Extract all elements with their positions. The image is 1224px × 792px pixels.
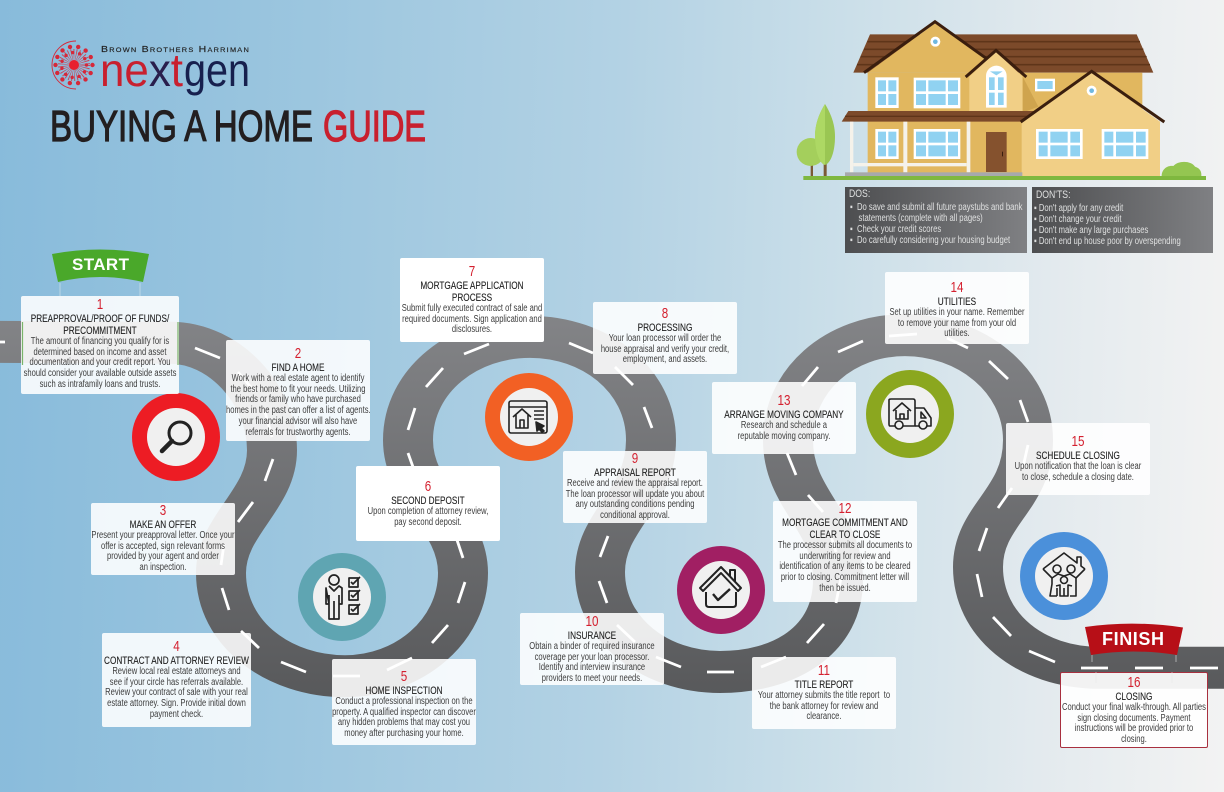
bush <box>1162 162 1201 176</box>
body 3 <box>91 530 235 573</box>
don'ts list <box>1034 202 1181 247</box>
don'ts heading: DON'TS: <box>1036 189 1070 201</box>
logo firm name: Brown Brothers Harriman <box>101 44 250 54</box>
body 4: see if your circle has referrals available. <box>110 677 243 688</box>
step number 8: 8 <box>662 305 668 322</box>
body 12: The processor submits all documents to <box>778 540 912 551</box>
step number 4: 4 <box>173 638 180 655</box>
card 7: mortgage application <box>400 258 544 342</box>
card 1: preapproval <box>21 296 179 394</box>
upper walls <box>868 23 1142 176</box>
body 9: any outstanding conditions pending <box>575 499 694 510</box>
step number 3: 3 <box>160 502 166 519</box>
body 8: employment, and assets. <box>623 354 707 365</box>
step number 10: 10 <box>586 613 598 630</box>
body 11: the bank attorney for review and <box>770 701 878 712</box>
body 2: your financial advisor will also have <box>239 416 357 427</box>
body 11 <box>758 690 890 722</box>
body 2: referrals for trustworthy agents. <box>245 427 351 438</box>
body 12 <box>778 540 912 594</box>
body 1: The amount of financing you qualify for is <box>31 336 169 347</box>
card 5: home inspection <box>332 659 476 745</box>
start banner: START <box>72 255 130 274</box>
step number 1: 1 <box>97 296 103 313</box>
right wing <box>1021 71 1164 176</box>
body 16 <box>1062 702 1206 745</box>
step number 6: 6 <box>425 478 431 495</box>
heading 16: CLOSING <box>1115 691 1152 703</box>
card 15: schedule closing <box>1006 423 1150 495</box>
don'ts list: ▪ Don't make any large purchases <box>1034 225 1148 236</box>
step number 7: 7 <box>469 263 475 280</box>
icon: family in house <box>1020 532 1108 620</box>
body 4: Review local real estate attorneys and <box>112 666 241 677</box>
dos list: ▪ Do carefully considering your housing budget <box>850 235 1010 246</box>
body 2: the best home to fit your needs. Utilizing <box>230 384 366 395</box>
step number 11: 11 <box>818 662 830 679</box>
body 10: providers to meet your needs. <box>542 673 642 684</box>
body 13: Research and schedule a <box>741 420 827 431</box>
heading 1 <box>31 313 170 337</box>
trees <box>797 104 835 176</box>
body 3: provided by your agent and order <box>107 551 219 562</box>
card 2: find a home <box>226 340 370 441</box>
body 3: Present your preapproval letter. Once your <box>91 530 235 541</box>
icon: moving truck <box>866 370 954 458</box>
step number 2: 2 <box>295 345 301 362</box>
heading 2: FIND A HOME <box>272 362 324 374</box>
body 7: required documents. Sign application and <box>402 314 542 325</box>
heading 4: CONTRACT AND ATTORNEY REVIEW <box>104 655 249 667</box>
ground <box>803 176 1206 180</box>
step number 13: 13 <box>778 392 790 409</box>
card 9: appraisal report <box>563 451 707 523</box>
body 9: The loan processor will update you about <box>566 489 704 500</box>
gable vent <box>930 37 940 47</box>
body 8: Your loan processor will order the <box>609 333 721 344</box>
body 10: coverage per your loan processor. <box>535 652 649 663</box>
card 14: utilities <box>885 272 1029 344</box>
heading 13: ARRANGE MOVING COMPANY <box>724 409 844 421</box>
body 10: Identify and interview insurance <box>539 662 645 673</box>
heading 12: CLEAR TO CLOSE <box>810 529 880 541</box>
body 15: Upon notification that the loan is clear <box>1015 461 1141 472</box>
icon: magnifying glass <box>132 393 220 481</box>
body 5: property. A qualified inspector can discover <box>332 707 476 718</box>
body 4: Review your contract of sale with your real <box>105 687 248 698</box>
step number 5: 5 <box>401 668 407 685</box>
body 16: sign closing documents. Payment <box>1077 713 1191 724</box>
porch step <box>845 172 1022 176</box>
body 14: utilities. <box>944 328 970 339</box>
body 12: then be issued. <box>819 583 871 594</box>
dos list: ▪ Check your credit scores <box>850 224 941 235</box>
body 3: offer is accepted, sign relevant forms <box>101 541 225 552</box>
body 4: payment check. <box>150 709 203 720</box>
card 12: mortgage commitment <box>773 501 917 602</box>
card 10: insurance <box>520 613 664 685</box>
body 9: Receive and review the appraisal report. <box>567 478 703 489</box>
body 6: Upon completion of attorney review, <box>368 506 488 517</box>
body 1: determined based on income and asset <box>33 347 166 358</box>
body 12: underwriting for review and <box>799 551 891 562</box>
body 12: identification of any items to be cleared <box>779 561 911 572</box>
finish banner <box>1085 624 1183 683</box>
card 6: second deposit <box>356 466 500 541</box>
icon: house with check <box>677 546 765 634</box>
heading 7: PROCESS <box>452 292 492 304</box>
body 7: disclosures. <box>452 324 492 335</box>
windows <box>875 66 1055 159</box>
body 14: Set up utilities in your name. Remember <box>889 307 1024 318</box>
heading 8: PROCESSING <box>638 322 692 334</box>
body 9: conditional approval. <box>600 510 670 521</box>
body 16: closing. <box>1121 734 1147 745</box>
heading 7 <box>420 280 524 304</box>
body 1: should consider your available outside assets <box>24 368 176 379</box>
main roof <box>853 34 1153 73</box>
body 7: Submit fully executed contract of sale and <box>402 303 542 314</box>
body 11: Your attorney submits the title report to <box>758 690 890 701</box>
heading 12: MORTGAGE COMMITMENT AND <box>782 517 908 529</box>
step number 12: 12 <box>839 500 851 517</box>
body 2 <box>226 373 371 438</box>
heading 7: MORTGAGE APPLICATION <box>420 280 524 292</box>
body 15: to close, schedule a closing date. <box>1022 472 1134 483</box>
logo word gen: gen <box>184 44 250 96</box>
icon: online house listing <box>485 373 573 461</box>
body 5: money after purchasing your home. <box>344 728 464 739</box>
body 5: any hidden problems that may cost you <box>338 717 470 728</box>
logo burst emblem <box>52 41 92 89</box>
body 6: pay second deposit. <box>394 517 462 528</box>
body 1: such as intrafamily loans and trusts. <box>40 379 160 390</box>
title dark part: BUYING A HOME <box>50 102 313 151</box>
body 2: homes in the past can offer a list of agents. <box>226 405 371 416</box>
heading 5: HOME INSPECTION <box>365 685 443 697</box>
card 11: title report <box>752 657 896 729</box>
body 4: estate attorney. Sign. Provide initial down <box>107 698 246 709</box>
body 13: reputable moving company. <box>738 431 830 442</box>
card 4: contract and attorney review <box>102 633 251 727</box>
body 9 <box>566 478 704 521</box>
body 5 <box>332 696 476 739</box>
porch roof <box>842 111 1035 122</box>
dos list: ▪ Do save and submit all future paystubs and bank <box>850 202 1022 212</box>
card 16: closing <box>1060 672 1208 748</box>
body 15 <box>1015 461 1142 483</box>
dos list <box>850 202 1022 246</box>
body 12: prior to closing. Commitment letter will <box>781 572 909 583</box>
center dormer <box>966 50 1038 113</box>
left gable roof <box>864 22 987 73</box>
body 16: instructions will be provided prior to <box>1075 723 1193 734</box>
heading 15: SCHEDULE CLOSING <box>1036 450 1120 462</box>
heading 1: PREAPPROVAL/PROOF OF FUNDS/ <box>31 313 169 325</box>
logo: Brown Brothers Harriman NextGen <box>52 40 250 96</box>
body 13 <box>738 420 830 442</box>
heading 10: INSURANCE <box>568 630 616 642</box>
step number 9: 9 <box>632 450 638 467</box>
step number 16: 16 <box>1128 674 1140 691</box>
don'ts list: ▪ Don't end up house poor by overspending <box>1034 236 1181 247</box>
card 3: make an offer <box>91 503 235 575</box>
card 13: arrange moving company <box>712 382 856 454</box>
title <box>50 102 426 151</box>
body 3: an inspection. <box>140 562 186 573</box>
body 10: Obtain a binder of required insurance <box>529 641 655 652</box>
panel: don'ts <box>1032 187 1213 253</box>
heading 1: PRECOMMITMENT <box>63 325 137 337</box>
heading 12 <box>782 517 908 541</box>
heading 6: SECOND DEPOSIT <box>391 495 465 507</box>
finish banner: FINISH <box>1102 629 1164 649</box>
panel: dos <box>845 187 1027 253</box>
body 14: to remove your name from your old <box>898 318 1016 329</box>
body 2: Work with a real estate agent to identify <box>232 373 364 384</box>
body 1: documentation and your credit report. You <box>29 357 170 368</box>
body 16: Conduct your final walk-through. All parties <box>1062 702 1206 713</box>
don'ts list: ▪ Don't change your credit <box>1034 214 1122 225</box>
body 7 <box>402 303 542 335</box>
body 5: Conduct a professional inspection on the <box>335 696 473 707</box>
icon: person with checklist <box>298 553 386 641</box>
body 8: house appraisal and verify your credit, <box>601 344 729 355</box>
heading 9: APPRAISAL REPORT <box>594 467 676 479</box>
porch columns and railing <box>850 122 970 172</box>
logo word next: next <box>100 44 183 96</box>
body 2: friends or family who have purchased <box>235 394 361 405</box>
body 4 <box>105 666 248 720</box>
body 6 <box>368 506 488 528</box>
body 10 <box>529 641 655 684</box>
dos list: statements (complete with all pages) <box>859 213 983 224</box>
house illustration <box>796 20 1206 180</box>
heading 11: TITLE REPORT <box>795 679 853 691</box>
dos heading: DOS: <box>849 188 870 200</box>
body 1 <box>24 336 176 390</box>
step number 14: 14 <box>951 279 963 296</box>
body 14 <box>889 307 1024 339</box>
heading 3: MAKE AN OFFER <box>130 519 196 531</box>
title red part: GUIDE <box>323 102 426 151</box>
right wing windows <box>1036 129 1148 159</box>
heading 14: UTILITIES <box>938 296 976 308</box>
card 8: processing <box>593 302 737 374</box>
door <box>986 132 1007 172</box>
don'ts list: ▪ Don't apply for any credit <box>1034 202 1123 214</box>
body 8 <box>601 333 729 365</box>
step number 15: 15 <box>1072 433 1084 450</box>
body 11: clearance. <box>806 711 841 722</box>
